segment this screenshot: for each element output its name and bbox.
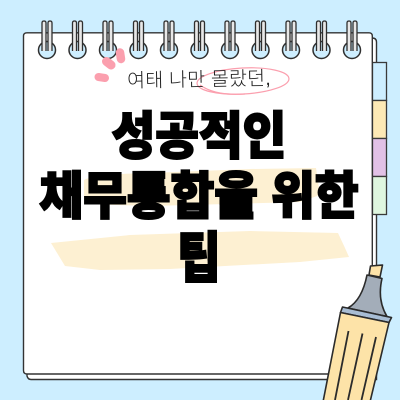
title: 성공적인 (112, 108, 286, 165)
title (39, 108, 359, 289)
notebook back page (27, 38, 376, 380)
title: 채무통합을 위한 (39, 168, 359, 225)
index tabs (372, 62, 386, 214)
highlight band: lower (51, 231, 349, 270)
handwritten subtitle: 여태 나만 몰랐던, (127, 68, 271, 92)
notebook front page (24, 33, 372, 374)
pink circled highlight (196, 66, 290, 96)
spiral binding (38, 21, 360, 58)
title: 팁 (177, 228, 221, 289)
pink accent marks (98, 52, 121, 78)
highlight band: second title line (84, 168, 320, 206)
highlighter marker (323, 265, 392, 400)
